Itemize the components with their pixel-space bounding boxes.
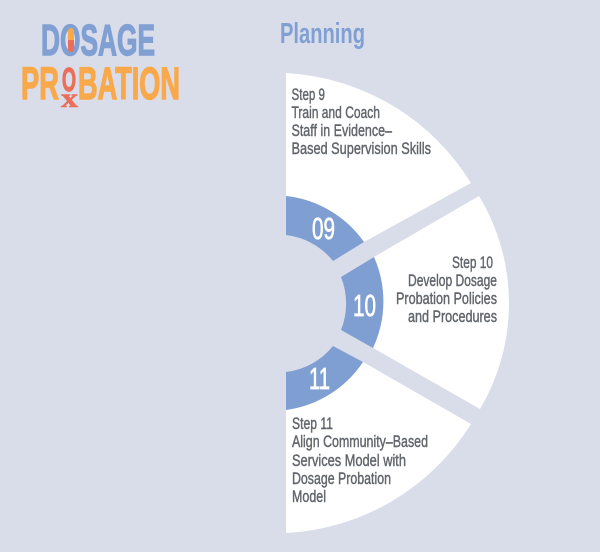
text: step 10: Probation Policies [396, 289, 497, 308]
text: step 11: Step 11 [292, 414, 333, 433]
number: 11: 11 [309, 361, 330, 396]
logo word: Dosage: DOSAGE [41, 16, 155, 65]
text: step 10 [396, 253, 497, 326]
text: step 9: Staff in Evidence– [292, 121, 392, 140]
text: step 11: Services Model with [292, 451, 406, 470]
text: step 10: Develop Dosage [408, 271, 497, 290]
text: step 9: Train and Coach [292, 103, 380, 122]
panel: step 9 [286, 73, 471, 261]
sector: step 11 white [286, 362, 471, 533]
logo letter: red x: x [61, 83, 79, 113]
logo word: Probation (BATION): BATION [78, 58, 180, 109]
number: 09: 09 [312, 211, 335, 246]
sector: step 11 blue [286, 346, 363, 410]
logo letter: red O: O [62, 61, 76, 98]
text: step 10: Step 10 [452, 253, 493, 272]
sector: step 9 blue [286, 196, 364, 261]
text: step 10: and Procedures [408, 307, 497, 326]
sector: step 10 white [373, 196, 509, 409]
text: step 9 [292, 85, 431, 158]
logo: Dosage Probation Rx [21, 16, 180, 113]
title: Planning: Planning [280, 18, 365, 50]
text: step 11 [292, 414, 428, 506]
logo word: Probation (PR): PR [21, 58, 59, 109]
sector: step 9 white [286, 73, 471, 242]
text: step 9: Step 9 [292, 85, 325, 104]
number: 10: 10 [353, 288, 376, 323]
icon: pill in letter O [68, 28, 74, 52]
text: step 9: Based Supervision Skills [292, 139, 431, 158]
panel: step 11 [286, 346, 471, 533]
text: step 11: Dosage Probation [292, 469, 391, 488]
text: step 11: Align Community–Based [292, 432, 428, 451]
text: step 11: Model [292, 487, 326, 506]
panel: step 10 [341, 196, 509, 409]
sector: step 10 blue [341, 257, 383, 348]
